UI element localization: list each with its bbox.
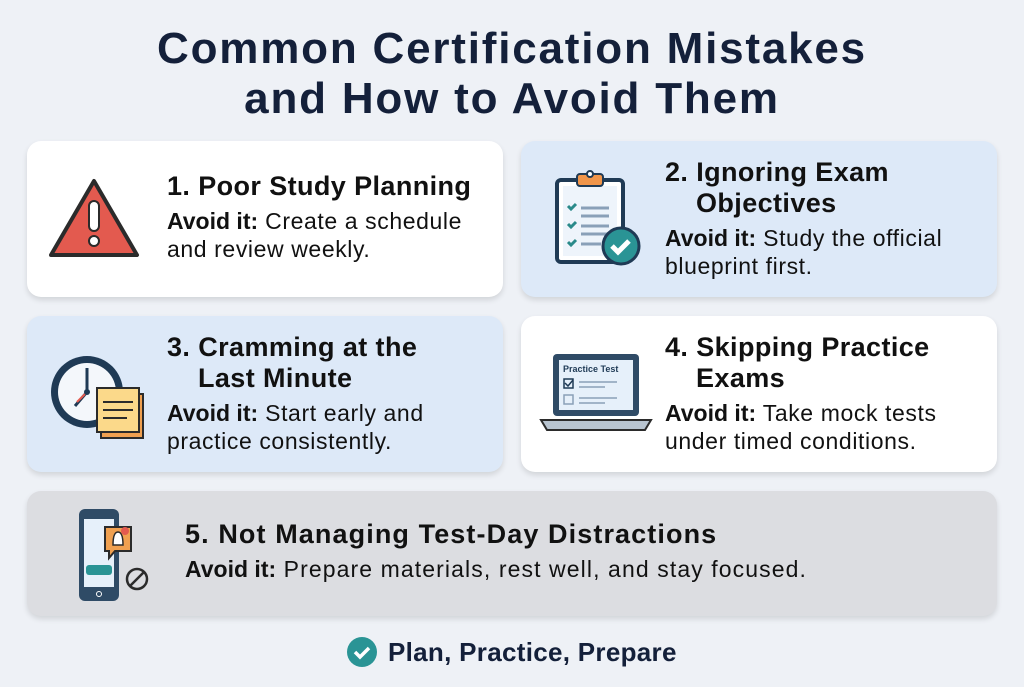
text: heading and advice: Avoid it: Take mock tests: [665, 400, 937, 426]
icon: laptop practice test: Practice Test: [563, 364, 618, 374]
text: heading and advice: [665, 332, 937, 454]
text: heading and advice: 4. Skipping Practice: [665, 332, 930, 362]
icon: clipboard with check: [555, 170, 640, 266]
text: heading and advice: Last Minute: [198, 363, 352, 393]
text: heading and advice: 5. Not Managing Test-Day Distractions: [185, 519, 717, 549]
icon: warning triangle: [49, 178, 140, 257]
footer: tagline: Plan, Practice, Prepare: [388, 636, 677, 666]
text: heading and advice: blueprint first.: [665, 253, 813, 279]
text: heading and advice: practice consistently.: [167, 428, 392, 454]
panel: cramming: [27, 316, 503, 472]
text: heading and advice: [185, 519, 807, 582]
text: heading and advice: Objectives: [696, 188, 837, 218]
panel: ignoring exam objectives: [521, 141, 997, 297]
title: Common Certification Mistakes: [157, 24, 867, 73]
text: heading and advice: and review weekly.: [167, 236, 370, 262]
text: heading and advice: Avoid it: Start early and: [167, 400, 424, 426]
text: heading and advice: 3. Cramming at the: [167, 332, 417, 362]
panel: poor study planning: [27, 141, 503, 297]
panel: skipping practice exams: [521, 316, 997, 472]
text: heading and advice: Avoid it: Create a schedule: [167, 208, 462, 234]
text: heading and advice: 2. Ignoring Exam: [665, 157, 889, 187]
title: [157, 24, 867, 123]
text: heading and advice: [167, 171, 471, 262]
text: heading and advice: Avoid it: Study the official: [665, 225, 942, 251]
text: heading and advice: under timed conditions.: [665, 428, 917, 454]
title: and How to Avoid Them: [244, 74, 780, 123]
icon: phone with notification: [79, 509, 148, 601]
icon: clock and notes: [51, 356, 144, 439]
text: heading and advice: Exams: [696, 363, 785, 393]
text: heading and advice: 1. Poor Study Planning: [167, 171, 471, 201]
panel: test-day distractions: [27, 491, 997, 616]
icon: check circle: [347, 637, 377, 667]
text: heading and advice: Avoid it: Prepare materials, rest well, and stay focused.: [185, 556, 807, 582]
text: heading and advice: [665, 157, 942, 279]
text: heading and advice: [167, 332, 424, 454]
icon: laptop practice test: [539, 354, 653, 431]
